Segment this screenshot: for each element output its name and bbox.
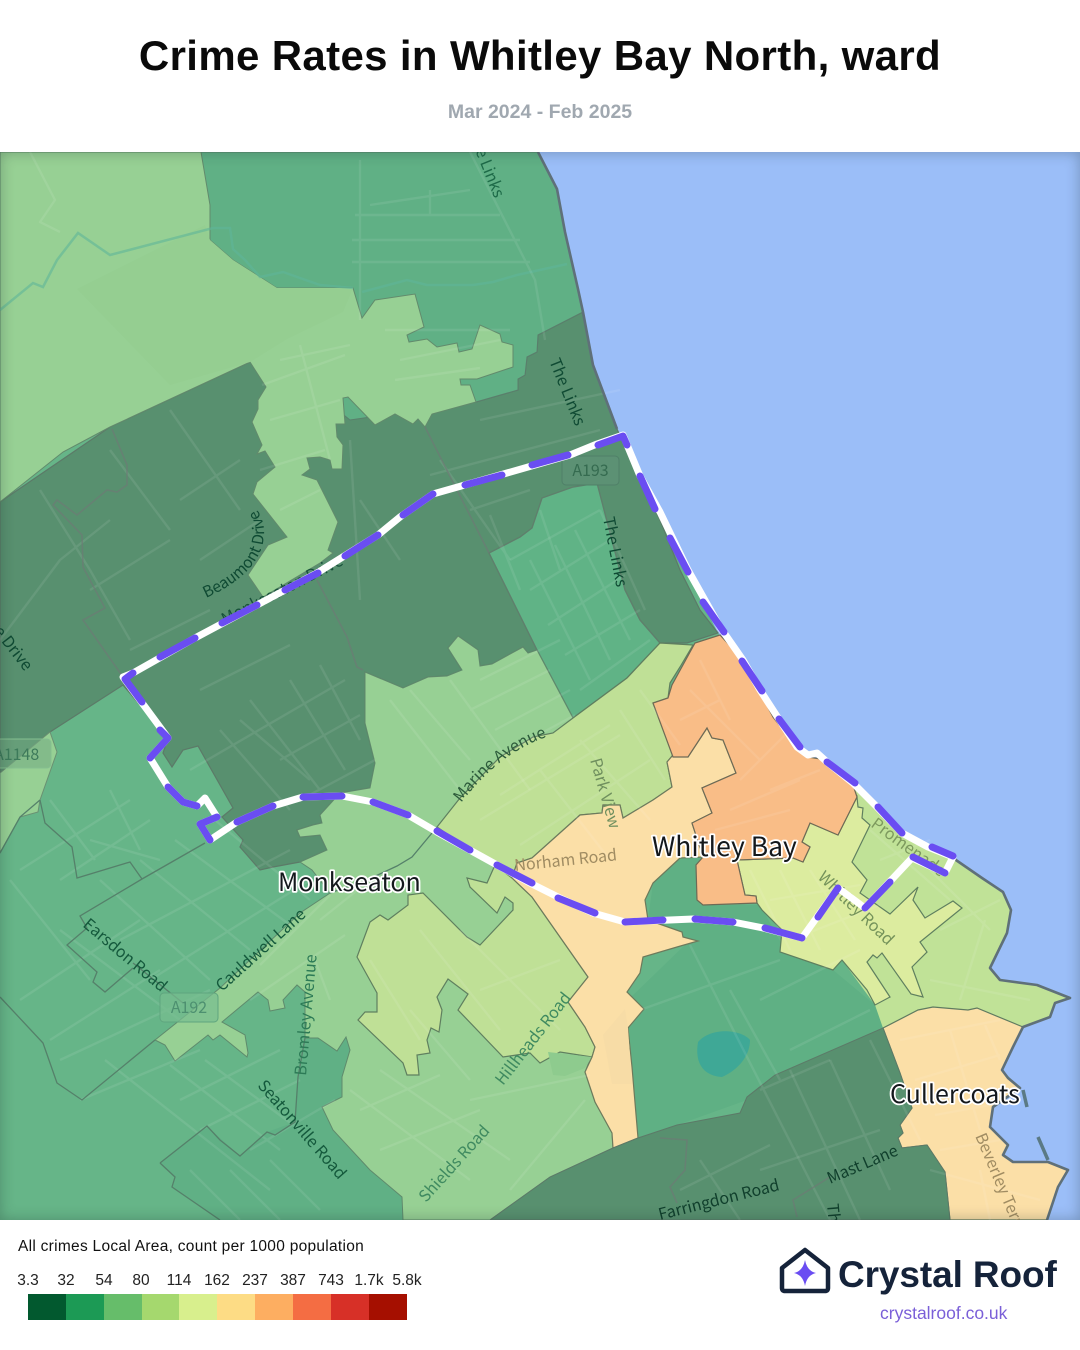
road labels: Farringdon Road: [655, 1172, 781, 1225]
legend tick labels: 114: [167, 1272, 191, 1289]
area: south-centre yellow-green: [357, 865, 595, 1075]
icon: house with star: [780, 1248, 830, 1294]
area: Whitley Bay orange: [653, 635, 857, 905]
place labels: Monkseaton: [278, 863, 421, 899]
piers: [1023, 1090, 1048, 1160]
road labels: Marine Avenue: [453, 730, 546, 802]
legend tick labels: 80: [132, 1272, 150, 1289]
road shield: A192: [160, 993, 218, 1022]
road shield: A1148: [0, 739, 51, 768]
logo: Crystal Roof: [780, 1248, 1057, 1323]
legend tick labels: 1.7k: [354, 1272, 384, 1289]
area: tan building patch: [627, 1027, 630, 1052]
ward boundary: [123, 435, 953, 938]
road labels: Seatonville Road: [253, 1074, 353, 1183]
road labels: Park View: [585, 755, 628, 831]
road labels: Mast Lane: [823, 1137, 901, 1189]
block outlines: west districts: [0, 800, 437, 1220]
legend tick labels: 237: [242, 1272, 268, 1289]
legend tick labels: [17, 1272, 422, 1289]
area: Seatonville darker green: [160, 1037, 403, 1220]
place labels: Cullercoats: [890, 1075, 1020, 1111]
area: north-west field tone: [210, 238, 353, 363]
road labels: Monkseaton Drive: [216, 547, 347, 629]
road labels: Norham Road: [513, 841, 618, 876]
road labels: The Links: [822, 1202, 852, 1275]
legend: [17, 1238, 422, 1320]
road labels: Cauldwell Lane: [209, 901, 310, 996]
road shield: A193: [562, 456, 619, 485]
legend tick labels: 54: [95, 1272, 113, 1289]
legend tick labels: 162: [204, 1272, 230, 1289]
road labels: Beaumont Drive: [202, 510, 264, 598]
area: Cullercoats tan: [883, 1007, 1068, 1220]
road labels: The Links: [544, 354, 593, 429]
website url: crystalroof.co.uk: [880, 1303, 1007, 1323]
street network: [0, 152, 1040, 1220]
road labels: Hillheads Road: [488, 986, 576, 1089]
road shield: A193: A193: [572, 457, 609, 481]
area: main dark green band: [0, 312, 718, 870]
area: north-west light green: [0, 152, 513, 597]
legend tick labels: 32: [57, 1272, 75, 1289]
ward outline: purple dashes: [125, 436, 953, 938]
land base: medium green areas: [0, 432, 1011, 1220]
legend colour scale: [28, 1294, 407, 1320]
sea: [540, 152, 1080, 1220]
area: north medium green: [202, 152, 538, 420]
road labels: Whitley Road: [814, 864, 901, 950]
area: west edge light green: [0, 732, 57, 853]
road labels: Promenade: [867, 811, 952, 881]
area: south dark green: [490, 1028, 950, 1220]
title: Crime Rates in Whitley Bay North, ward: [139, 32, 941, 79]
road labels: Shields Road: [412, 1119, 494, 1206]
place labels: [278, 825, 1020, 1111]
area: Cullercoats north-east yellow-green: [842, 785, 1070, 1028]
area: central tan: [512, 728, 736, 1148]
area: links medium green patch: [489, 483, 660, 718]
subtitle: date range: Mar 2024 - Feb 2025: [448, 101, 632, 123]
legend tick labels: 3.3: [17, 1272, 39, 1289]
road labels: Beverley Terrace: [970, 1129, 1041, 1251]
road labels: Bromley Avenue: [287, 953, 322, 1076]
place labels: Whitley Bay: [652, 825, 797, 864]
road labels: The Links: [598, 514, 635, 589]
road labels: The Links: [463, 126, 512, 201]
coastline: [538, 152, 1070, 1220]
road labels: Earsdon Road: [79, 911, 173, 996]
legend tick labels: 387: [280, 1272, 306, 1289]
area: small field patch: [548, 1052, 592, 1076]
lake: [697, 1031, 750, 1077]
legend title: All crimes Local Area, count per 1000 population: [18, 1238, 364, 1255]
river: [0, 228, 567, 310]
road shield: A192: A192: [171, 994, 207, 1018]
wordmark: Crystal Roof: [838, 1254, 1057, 1295]
map edge shading: [0, 152, 1080, 1220]
legend tick labels: 5.8k: [392, 1272, 422, 1289]
area: Whitley Road pale yellow-green: [737, 797, 962, 1005]
area: north-centre yellow-green: [437, 643, 693, 878]
ward outline: white casing: [123, 435, 953, 938]
legend tick labels: 743: [318, 1272, 344, 1289]
administrative boundary lines: [53, 427, 830, 1217]
area: Monkseaton light green: [155, 636, 613, 1220]
area: centre medium green: [613, 857, 883, 1148]
choropleth map: [0, 152, 1080, 1220]
